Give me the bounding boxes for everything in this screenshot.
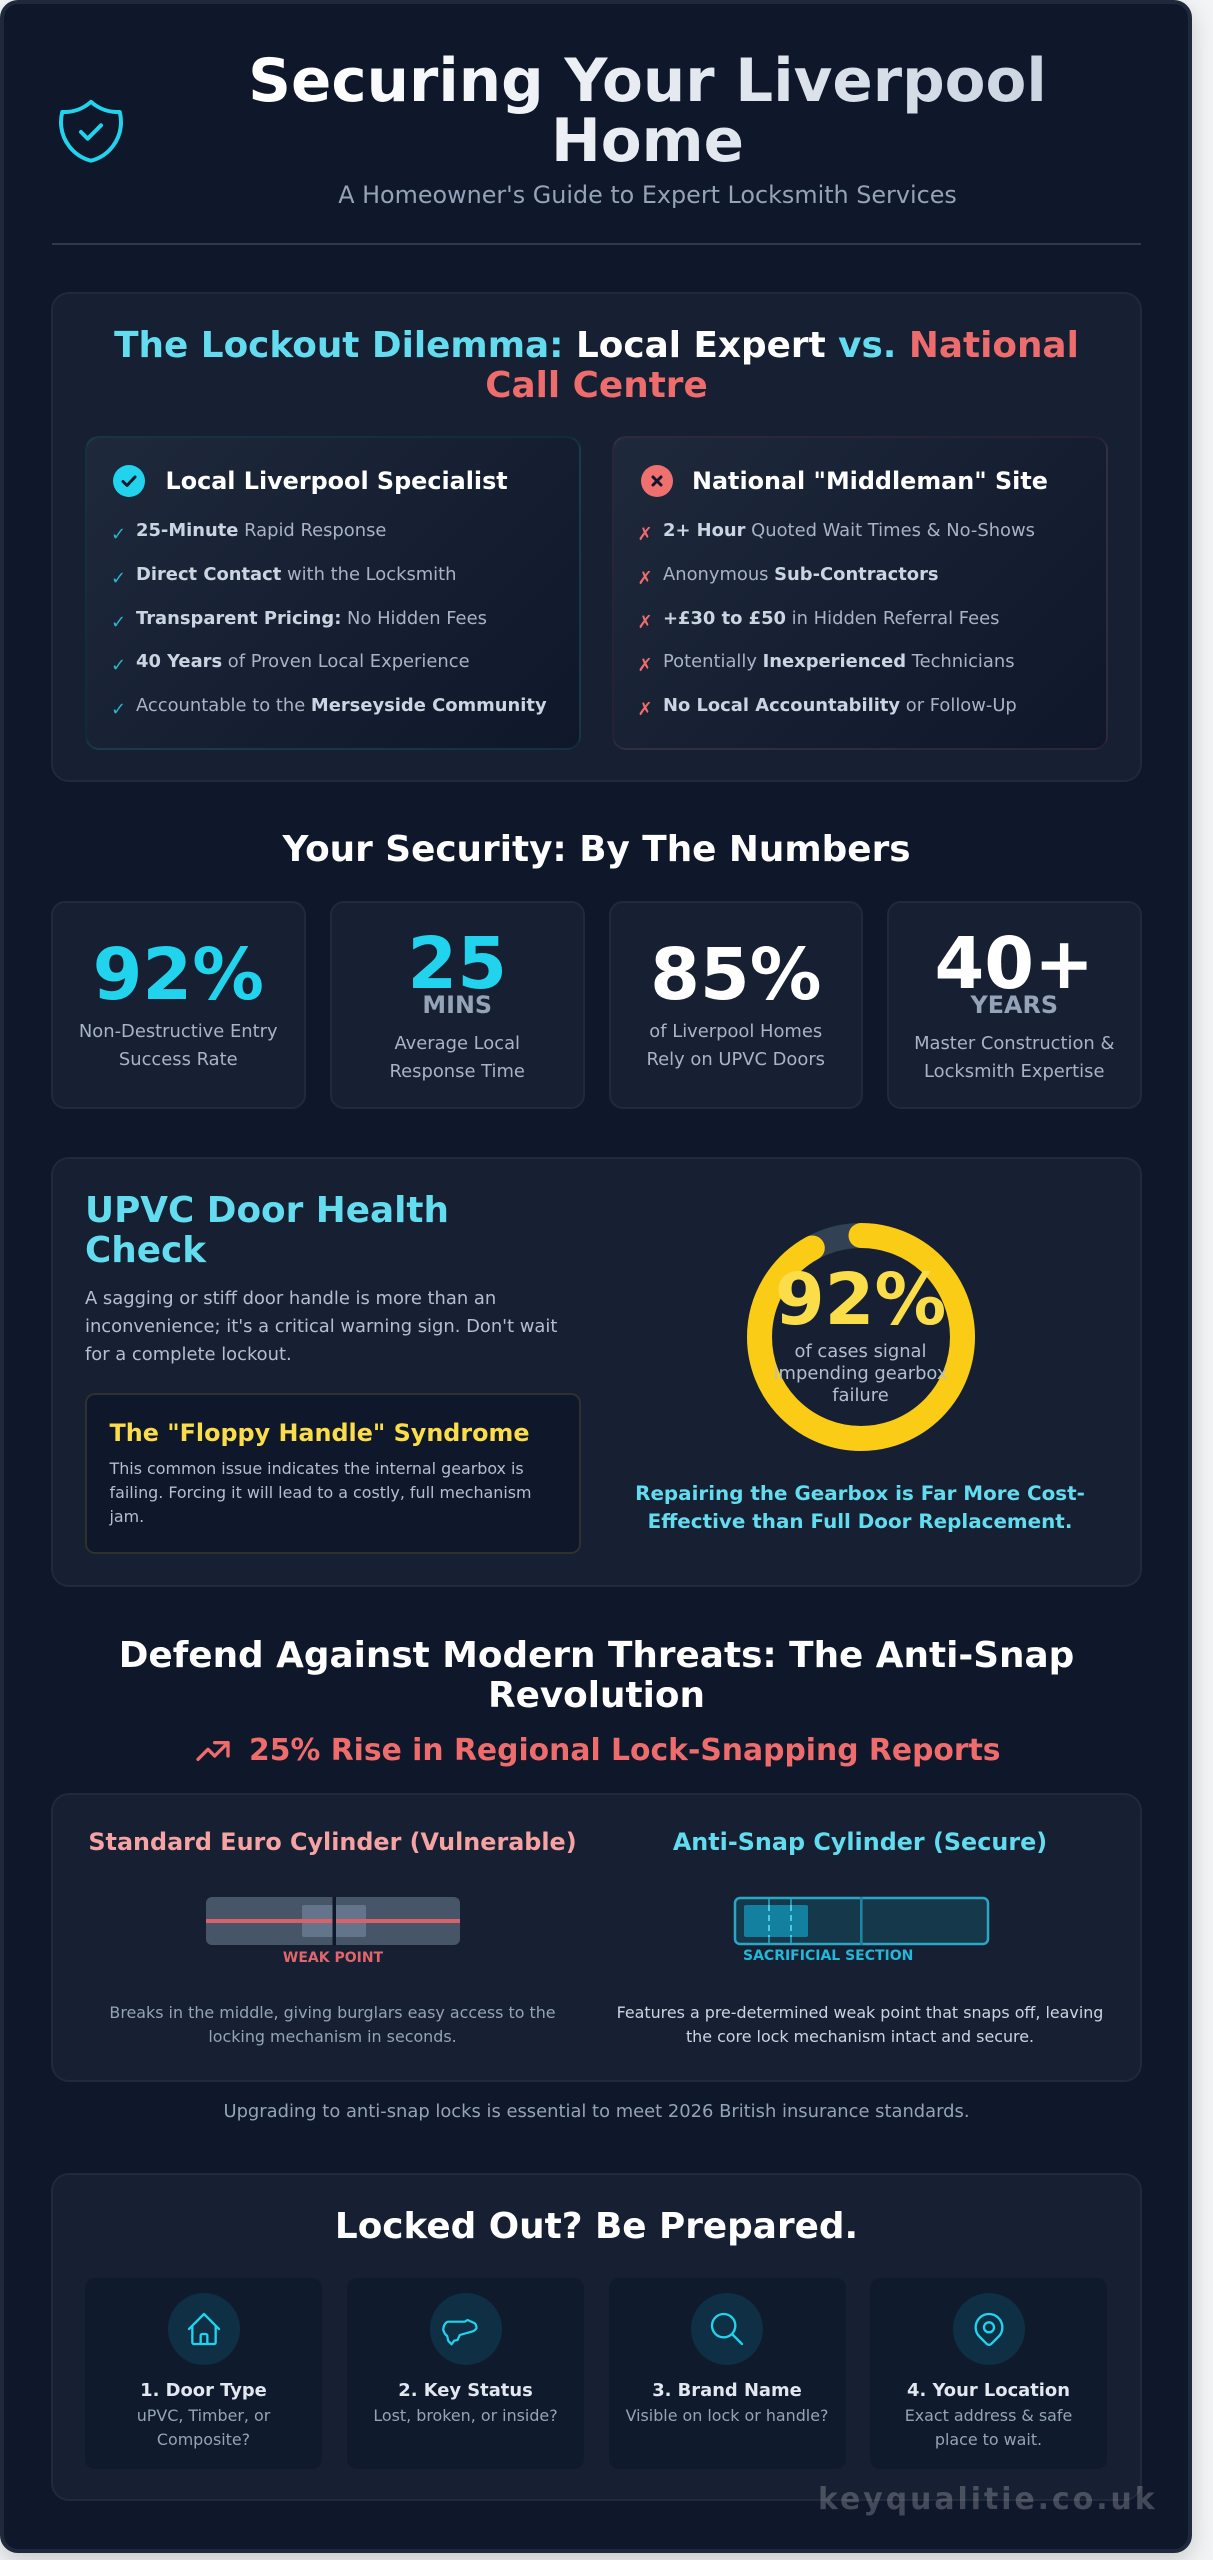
text: vulnerable: Breaks in the middle, giving burglars easy access to the bbox=[109, 2003, 556, 2022]
text: vulnerable: locking mechanism in seconds. bbox=[208, 2027, 457, 2046]
heading: secure: Anti-Snap Cylinder (Secure) bbox=[673, 1828, 1047, 1856]
caption: Repairing the Gearbox is Far More Cost- bbox=[635, 1482, 1085, 1505]
text: vulnerable bbox=[109, 2003, 556, 2046]
list: national: No Local Accountability or Follow-Up bbox=[663, 695, 1017, 716]
heading: Check bbox=[85, 1230, 206, 1270]
heading: The Lockout Dilemma: Local Expert vs. National bbox=[114, 324, 1079, 366]
heading: national: National "Middleman" Site bbox=[692, 467, 1048, 495]
step: key status: 2. Key Status bbox=[398, 2380, 533, 2401]
list: national: ✗ bbox=[638, 655, 653, 676]
caption: Effective than Full Door Replacement. bbox=[648, 1510, 1072, 1533]
step: brand name: 3. Brand Name bbox=[652, 2380, 802, 2401]
stat card: 92% bbox=[51, 901, 306, 1109]
paragraph: A sagging or stiff door handle is more than an bbox=[85, 1288, 496, 1309]
watermark: keyqualitie.co.uk bbox=[818, 2482, 1158, 2517]
stat card: 85%: of Liverpool Homes bbox=[649, 1021, 822, 1042]
donut label: impending gearbox bbox=[774, 1363, 947, 1384]
note: insurance: Upgrading to anti-snap locks is essential to meet 2026 British insurance standards. bbox=[223, 2101, 970, 2122]
list: national: Potentially Inexperienced Technicians bbox=[663, 651, 1015, 672]
stat card: 85% bbox=[608, 901, 863, 1109]
step: door type: Composite? bbox=[157, 2430, 250, 2449]
list: local bbox=[111, 520, 547, 720]
header bbox=[59, 46, 1047, 208]
stat card: 40+ years: Locksmith Expertise bbox=[924, 1061, 1104, 1082]
diagram: standard cylinder bbox=[206, 1897, 460, 1966]
icon: location pin bbox=[952, 2293, 1024, 2365]
heading: vulnerable: Standard Euro Cylinder (Vulnerable) bbox=[88, 1828, 577, 1856]
step: your location: Exact address & safe bbox=[905, 2406, 1072, 2425]
list: local: Direct Contact with the Locksmith bbox=[136, 564, 457, 585]
callout: floppy handle: failing. Forcing it will lead to a costly, full mechanism bbox=[110, 1483, 532, 1502]
callout: floppy handle bbox=[85, 1393, 581, 1554]
sub-card: national bbox=[612, 436, 1108, 750]
stat card: 40+ years: 40+ bbox=[934, 922, 1094, 1005]
icon: magnifier bbox=[691, 2293, 763, 2365]
stat card: 25 mins: Average Local bbox=[394, 1033, 520, 1054]
heading bbox=[85, 1190, 449, 1270]
stat card: 85%: 85% bbox=[650, 933, 821, 1016]
panel: cylinder comparison bbox=[51, 1793, 1142, 2082]
title: Securing Your Liverpool bbox=[248, 46, 1047, 116]
list: local: 40 Years of Proven Local Experience bbox=[136, 651, 470, 672]
callout: floppy handle: This common issue indicates the internal gearbox is bbox=[110, 1459, 524, 1478]
heading: Locked Out? Be Prepared. bbox=[335, 2206, 858, 2247]
icon: shield bbox=[59, 100, 123, 163]
paragraph: inconvenience; it's a critical warning sign. Don't wait bbox=[85, 1316, 557, 1337]
diagram: standard cylinder: WEAK POINT bbox=[283, 1950, 384, 1966]
list: local: ✓ bbox=[111, 655, 126, 676]
stat card: 25 mins bbox=[330, 901, 584, 1109]
stat card: 40+ years: Master Construction & bbox=[914, 1033, 1114, 1054]
list: national: ✗ bbox=[638, 699, 653, 720]
heading: by the numbers: Your Security: By The Numbers bbox=[282, 829, 911, 870]
list: national: ✗ bbox=[638, 568, 653, 589]
stat card: 92%: Non-Destructive Entry bbox=[79, 1021, 278, 1042]
step: key status: Lost, broken, or inside? bbox=[373, 2406, 558, 2425]
donut label bbox=[774, 1341, 947, 1406]
step: brand name: Visible on lock or handle? bbox=[626, 2406, 828, 2425]
text: secure: Features a pre-determined weak point that snaps off, leaving bbox=[617, 2003, 1103, 2022]
step: your location: place to wait. bbox=[935, 2430, 1042, 2449]
panel: door health bbox=[51, 1157, 1142, 1587]
stat card: 92%: Success Rate bbox=[119, 1049, 238, 1070]
list: local: Accountable to the Merseyside Community bbox=[136, 695, 547, 716]
heading bbox=[114, 324, 1079, 406]
icon: check circle bbox=[113, 465, 145, 497]
text: secure: the core lock mechanism intact and secure. bbox=[686, 2027, 1034, 2046]
list: local: Transparent Pricing: No Hidden Fees bbox=[136, 608, 487, 628]
donut label: of cases signal bbox=[794, 1341, 926, 1362]
list: national: +£30 to £50 in Hidden Referral Fees bbox=[663, 608, 999, 628]
stat card: 40+ years bbox=[887, 901, 1142, 1109]
stat card: 25 mins: 25 bbox=[407, 922, 507, 1005]
step: door type bbox=[85, 2278, 322, 2469]
list: local: ✓ bbox=[111, 612, 126, 633]
heading: modern threats: Revolution bbox=[488, 1675, 705, 1716]
heading: local: Local Liverpool Specialist bbox=[166, 467, 508, 495]
list: local: ✓ bbox=[111, 524, 126, 545]
text: secure bbox=[617, 2003, 1103, 2046]
heading: modern threats bbox=[119, 1635, 1074, 1716]
step: your location: 4. Your Location bbox=[907, 2380, 1070, 2401]
panel: be prepared bbox=[51, 2173, 1142, 2501]
diagram: anti-snap cylinder: SACRIFICIAL SECTION bbox=[743, 1948, 913, 1964]
heading: Call Centre bbox=[485, 364, 708, 406]
subtitle: A Homeowner's Guide to Expert Locksmith Services bbox=[338, 180, 957, 208]
list: local: 25-Minute Rapid Response bbox=[136, 520, 386, 541]
stat card: 92%: 92% bbox=[93, 933, 264, 1016]
list: local: ✓ bbox=[111, 568, 126, 589]
paragraph bbox=[85, 1288, 557, 1365]
heading: modern threats: Defend Against Modern Threats: The Anti-Snap bbox=[119, 1635, 1074, 1676]
donut label: failure bbox=[832, 1385, 889, 1406]
icon: key bbox=[430, 2293, 502, 2365]
paragraph: for a complete lockout. bbox=[85, 1344, 292, 1365]
donut value: 92% bbox=[775, 1258, 946, 1341]
icon: trending up bbox=[196, 1740, 230, 1762]
stat line: rising reports: 25% Rise in Regional Lock-Snapping Reports bbox=[249, 1733, 1001, 1768]
callout: floppy handle: jam. bbox=[110, 1507, 144, 1526]
list: local: ✓ bbox=[111, 699, 126, 720]
heading: UPVC Door Health bbox=[85, 1190, 449, 1230]
title bbox=[148, 52, 1148, 172]
step: brand name bbox=[608, 2278, 846, 2469]
title: Home bbox=[551, 106, 744, 176]
list: national: ✗ bbox=[638, 524, 653, 545]
list: national: 2+ Hour Quoted Wait Times & No-Shows bbox=[663, 520, 1035, 541]
chart: donut 92% bbox=[747, 1223, 975, 1451]
list: national: ✗ bbox=[638, 612, 653, 633]
stat card: 85%: Rely on UPVC Doors bbox=[646, 1049, 825, 1070]
step: key status bbox=[347, 2278, 584, 2469]
panel: lockout dilemma bbox=[51, 292, 1142, 782]
step: door type: 1. Door Type bbox=[140, 2380, 267, 2401]
icon: house bbox=[168, 2293, 240, 2365]
stat card: 25 mins: Response Time bbox=[390, 1061, 525, 1082]
stat card: 25 mins: MINS bbox=[422, 991, 492, 1019]
callout: floppy handle: The "Floppy Handle" Syndrome bbox=[110, 1419, 530, 1447]
stat card: 40+ years: YEARS bbox=[970, 991, 1058, 1019]
caption bbox=[635, 1482, 1085, 1533]
list: national: Anonymous Sub-Contractors bbox=[663, 564, 939, 585]
step: door type: uPVC, Timber, or bbox=[137, 2406, 270, 2425]
step: your location bbox=[870, 2278, 1107, 2469]
sub-card: local specialist bbox=[85, 436, 581, 750]
list: national bbox=[638, 520, 1035, 720]
icon: cross circle bbox=[641, 465, 673, 497]
diagram: anti-snap cylinder bbox=[734, 1896, 990, 1964]
